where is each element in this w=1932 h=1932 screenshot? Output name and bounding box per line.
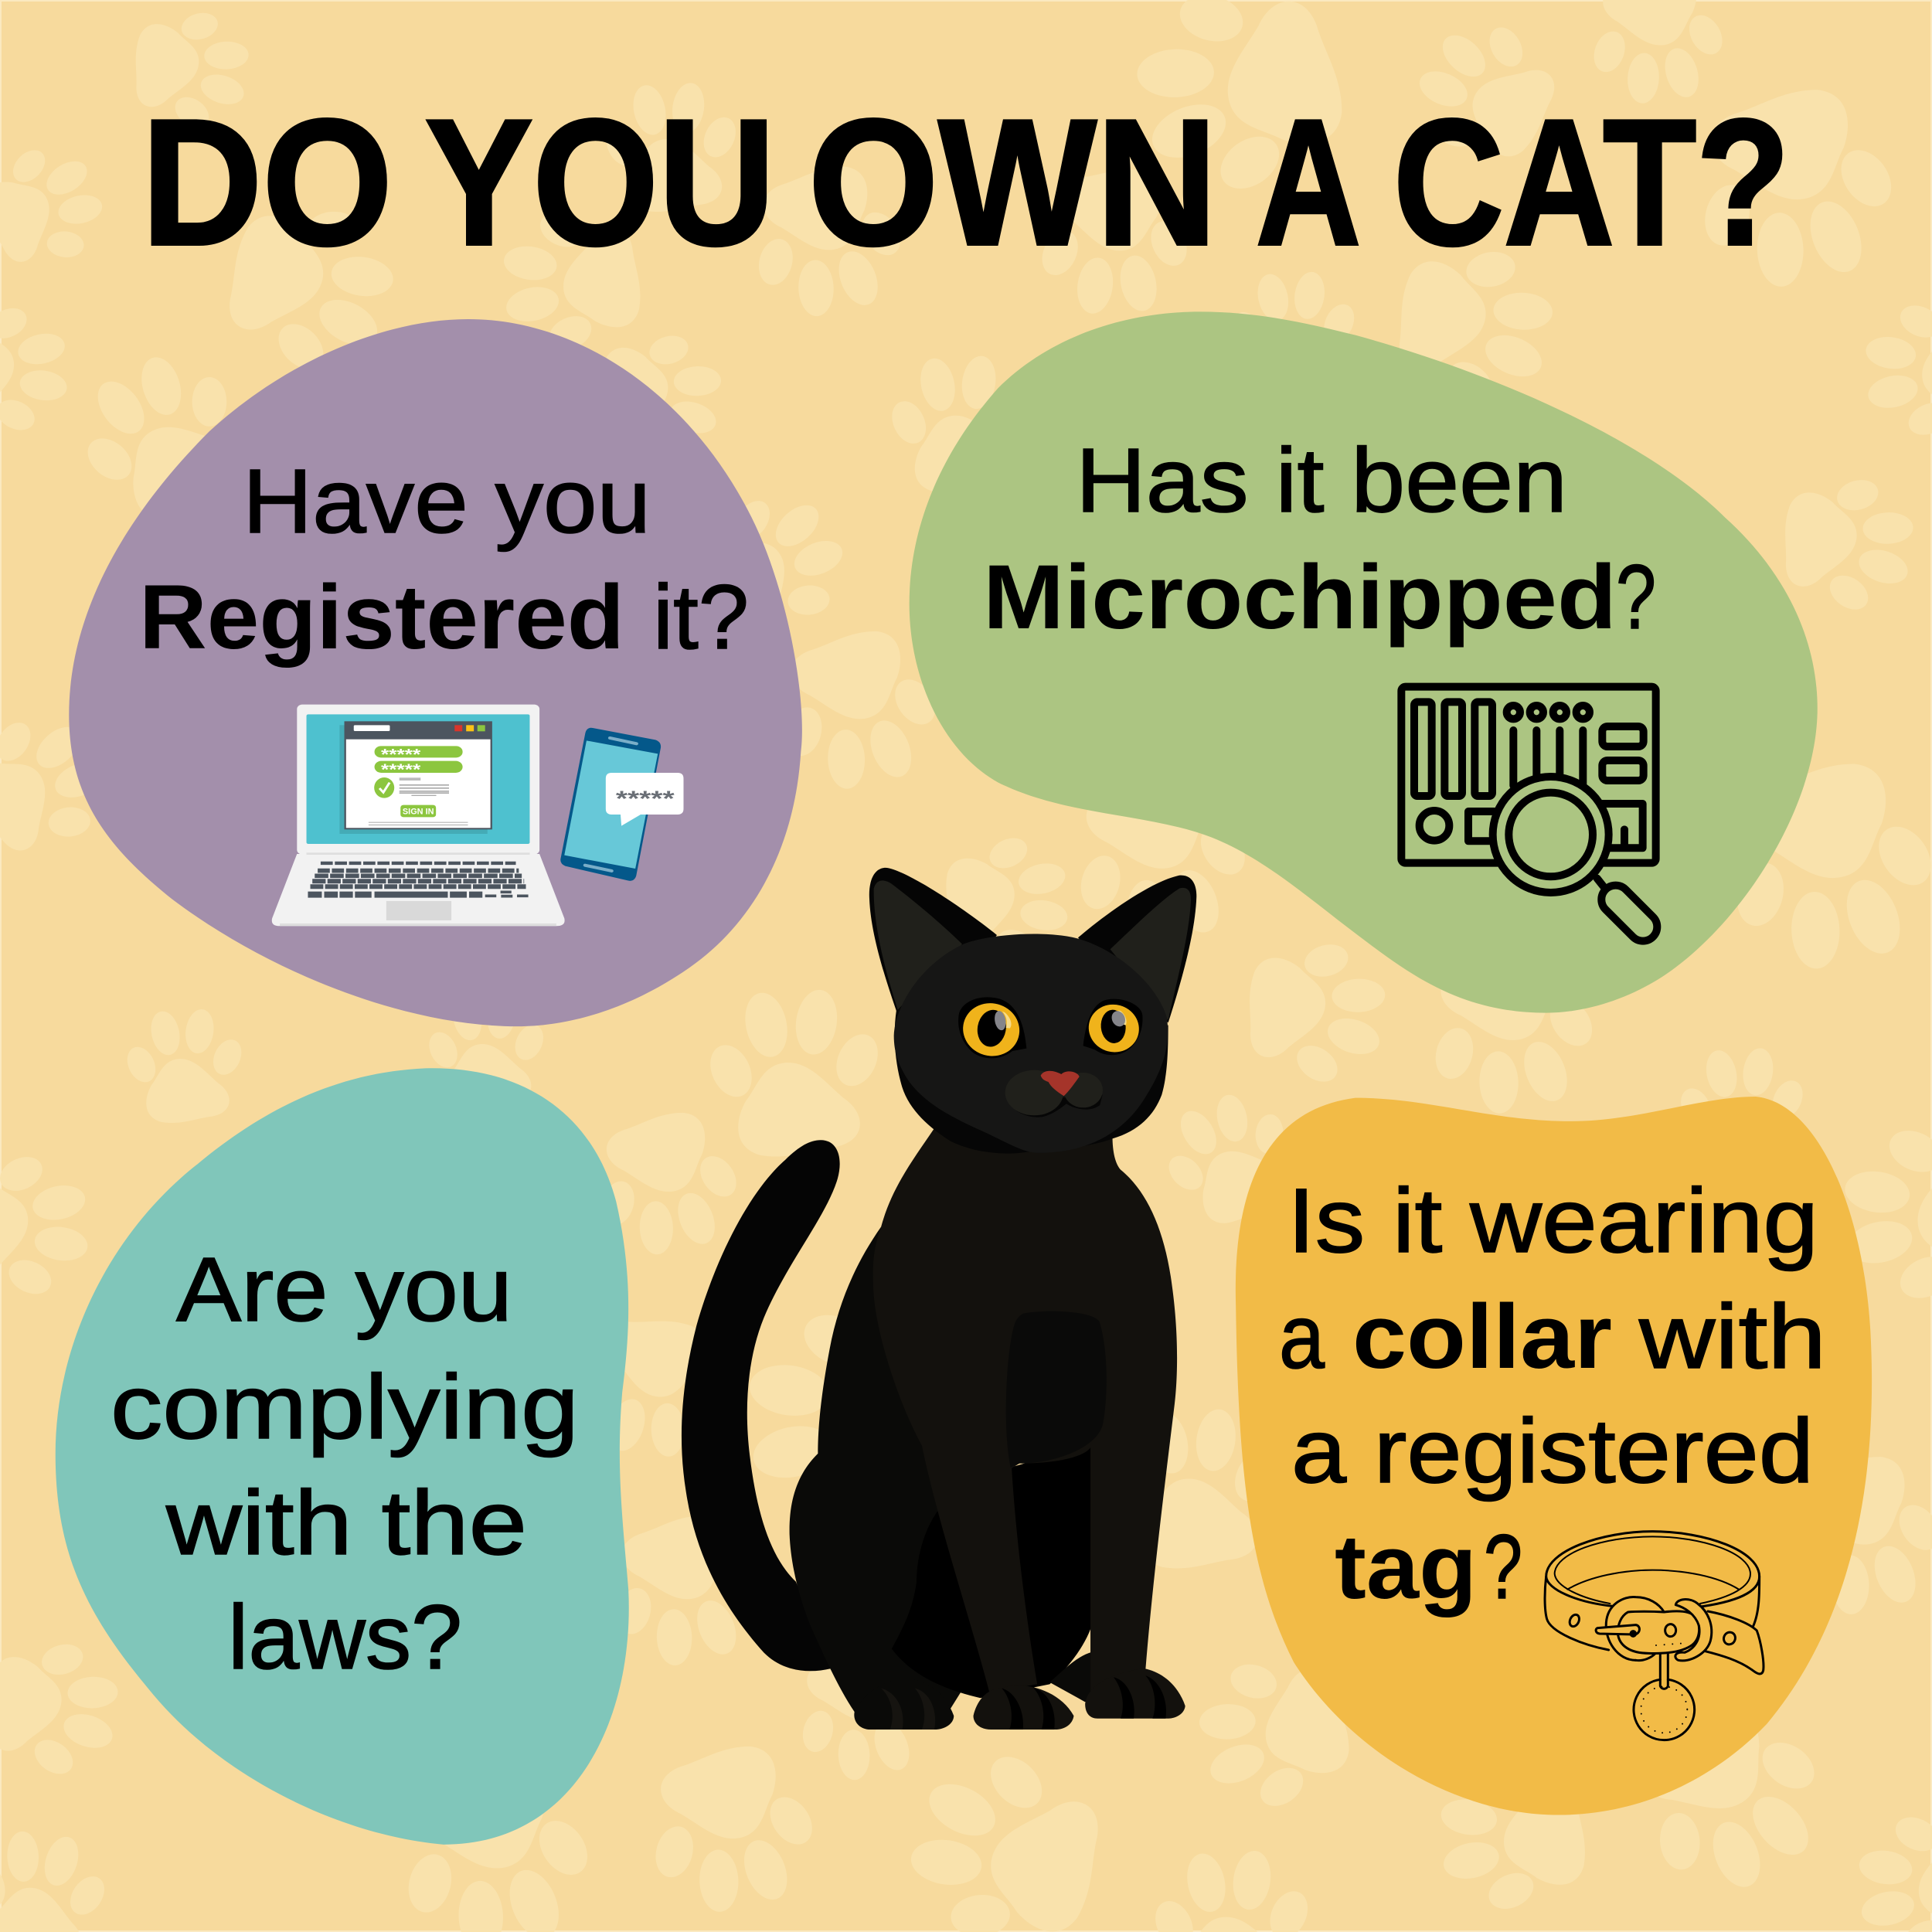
cat tail xyxy=(682,1140,840,1671)
phone xyxy=(560,728,661,881)
question: laws: laws? xyxy=(228,1587,462,1689)
question: are you: Are you xyxy=(176,1239,512,1341)
orange blob xyxy=(1236,1097,1872,1815)
title: YOU xyxy=(425,83,775,283)
question: with: with xyxy=(1638,1286,1826,1388)
icon: circuit board with magnifier xyxy=(1401,687,1663,947)
muzzle xyxy=(1005,1070,1103,1117)
login window: ***** xyxy=(381,760,421,778)
login window xyxy=(345,721,492,829)
title: CAT? xyxy=(1393,83,1790,283)
question mark: ? xyxy=(1616,546,1656,648)
teal blob xyxy=(56,1068,629,1845)
cat head xyxy=(869,868,1196,1154)
question: registered: Registered xyxy=(139,566,624,668)
green blob xyxy=(910,311,1818,1013)
laptop screen xyxy=(307,714,529,844)
speech bubble with password: ***** xyxy=(616,787,675,811)
trackpad xyxy=(386,901,451,920)
login window: SIGN IN xyxy=(403,806,434,816)
speech bubble with password xyxy=(606,773,683,826)
panel: collar xyxy=(1236,1097,1872,1815)
question: have you: Have you xyxy=(243,451,651,553)
title: OWN xyxy=(808,83,1217,283)
question: it: it? xyxy=(653,566,749,668)
head face xyxy=(894,934,1168,1153)
title: DO xyxy=(141,83,393,283)
laptop base xyxy=(272,854,565,926)
purple blob xyxy=(69,319,802,1026)
left ear xyxy=(869,868,997,1015)
left eye xyxy=(957,997,1026,1063)
laptop lid xyxy=(297,705,539,855)
panel: laws xyxy=(56,1068,629,1845)
question: has it been: Has it been xyxy=(1076,430,1567,532)
question: with the: with the xyxy=(165,1472,527,1574)
question: tag: tag xyxy=(1335,1516,1477,1618)
question: a registered: a registered xyxy=(1291,1400,1814,1502)
question: complying: complying xyxy=(111,1356,579,1458)
question mark: ? xyxy=(1484,1516,1522,1618)
right eye xyxy=(1083,999,1145,1058)
login window: ***** xyxy=(381,745,421,764)
nose xyxy=(1041,1071,1080,1096)
title xyxy=(141,83,1790,283)
cat body xyxy=(790,1128,1185,1730)
right ear xyxy=(1078,876,1196,1022)
question: a: a xyxy=(1279,1286,1325,1388)
cat paws xyxy=(854,1679,954,1730)
panel: registered xyxy=(69,319,802,1026)
keyboard xyxy=(308,863,529,896)
black cat illustration xyxy=(682,868,1196,1730)
panel: microchipped xyxy=(910,311,1818,1013)
title: A xyxy=(1256,83,1361,283)
question: is it wearing: Is it wearing xyxy=(1287,1170,1818,1272)
question: microchipped: Microchipped xyxy=(983,546,1617,648)
icon: laptop and phone sign in xyxy=(272,705,683,926)
icon: collar with tag xyxy=(1545,1532,1764,1740)
question: collar: collar xyxy=(1352,1286,1612,1388)
head shadow xyxy=(895,1010,1168,1154)
